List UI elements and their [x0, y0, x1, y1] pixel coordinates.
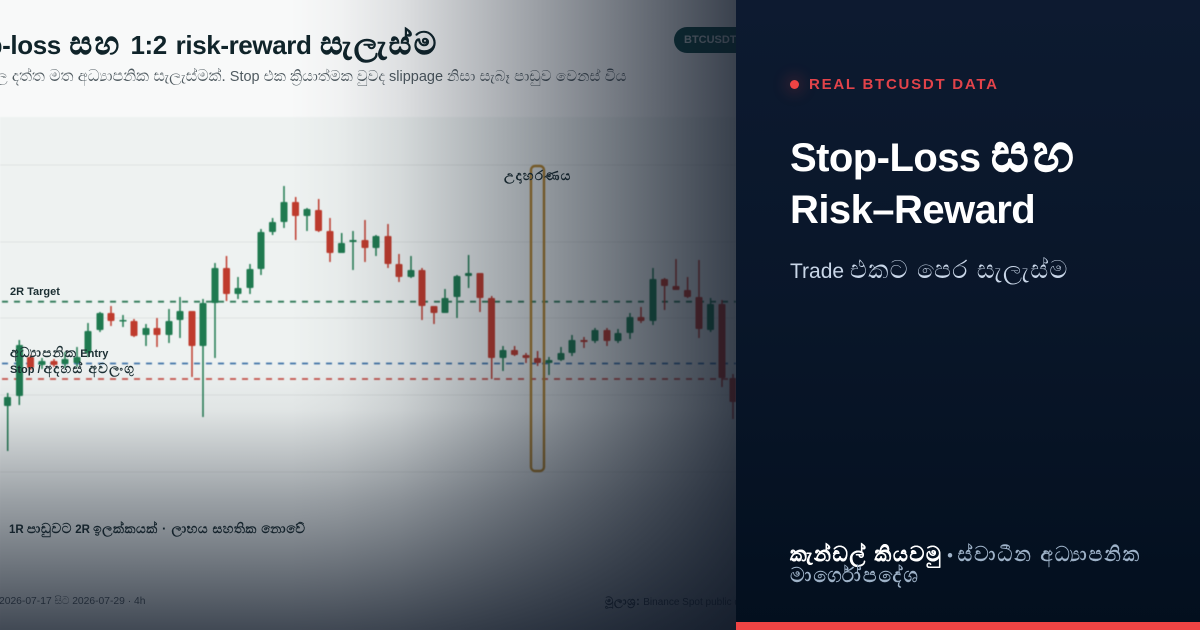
chart caption: 1R පාඩුවට 2R ඉලක්කයක් · ලාභය සහතික නොවේ — [9, 521, 306, 536]
eyebrow label: REAL BTCUSDT DATA — [809, 76, 999, 93]
main heading: Risk–Reward — [790, 188, 1035, 232]
label: example: උදාහරණය — [504, 168, 572, 183]
accent bar — [736, 622, 1200, 630]
chart card subtitle: මිල දත්ත මත අධ්‍යාපනික සැලැස්මක්. Stop එක ක්‍රියාත්මක වුවද slippage නිසා සැබෑ පාඩුව වෙනස් විය — [0, 68, 627, 85]
green candles — [4, 186, 714, 451]
red candles — [27, 197, 736, 419]
footer brand text: කැන්ඩල් කියවමු • ස්වාධීන අධ්‍යාපනික මාර්ගෝපදේශ — [790, 543, 1141, 587]
price level lines — [2, 302, 736, 379]
main heading — [790, 125, 1078, 232]
candlestick chart — [0, 118, 736, 473]
example highlight box — [531, 166, 544, 471]
label: stop: Stop / අදහස් අවලංගු — [10, 361, 135, 376]
main heading: Stop-Loss සහ — [790, 125, 1078, 183]
panel: blurred chart background — [0, 0, 736, 630]
symbol pill — [674, 27, 774, 53]
icon: live dot — [790, 80, 799, 89]
fade overlay: horizontal — [0, 0, 736, 630]
fade overlay: vertical — [0, 0, 736, 630]
label: 2R target: 2R Target — [10, 286, 60, 298]
sub heading: Trade එකට පෙර සැලැස්ම — [790, 256, 1069, 284]
date range: 2026-07-17 සිට 2026-07-29 · 4h — [0, 596, 145, 607]
label: entry: අධ්‍යාපනික Entry — [10, 345, 108, 360]
panel: right title panel — [736, 0, 1200, 630]
